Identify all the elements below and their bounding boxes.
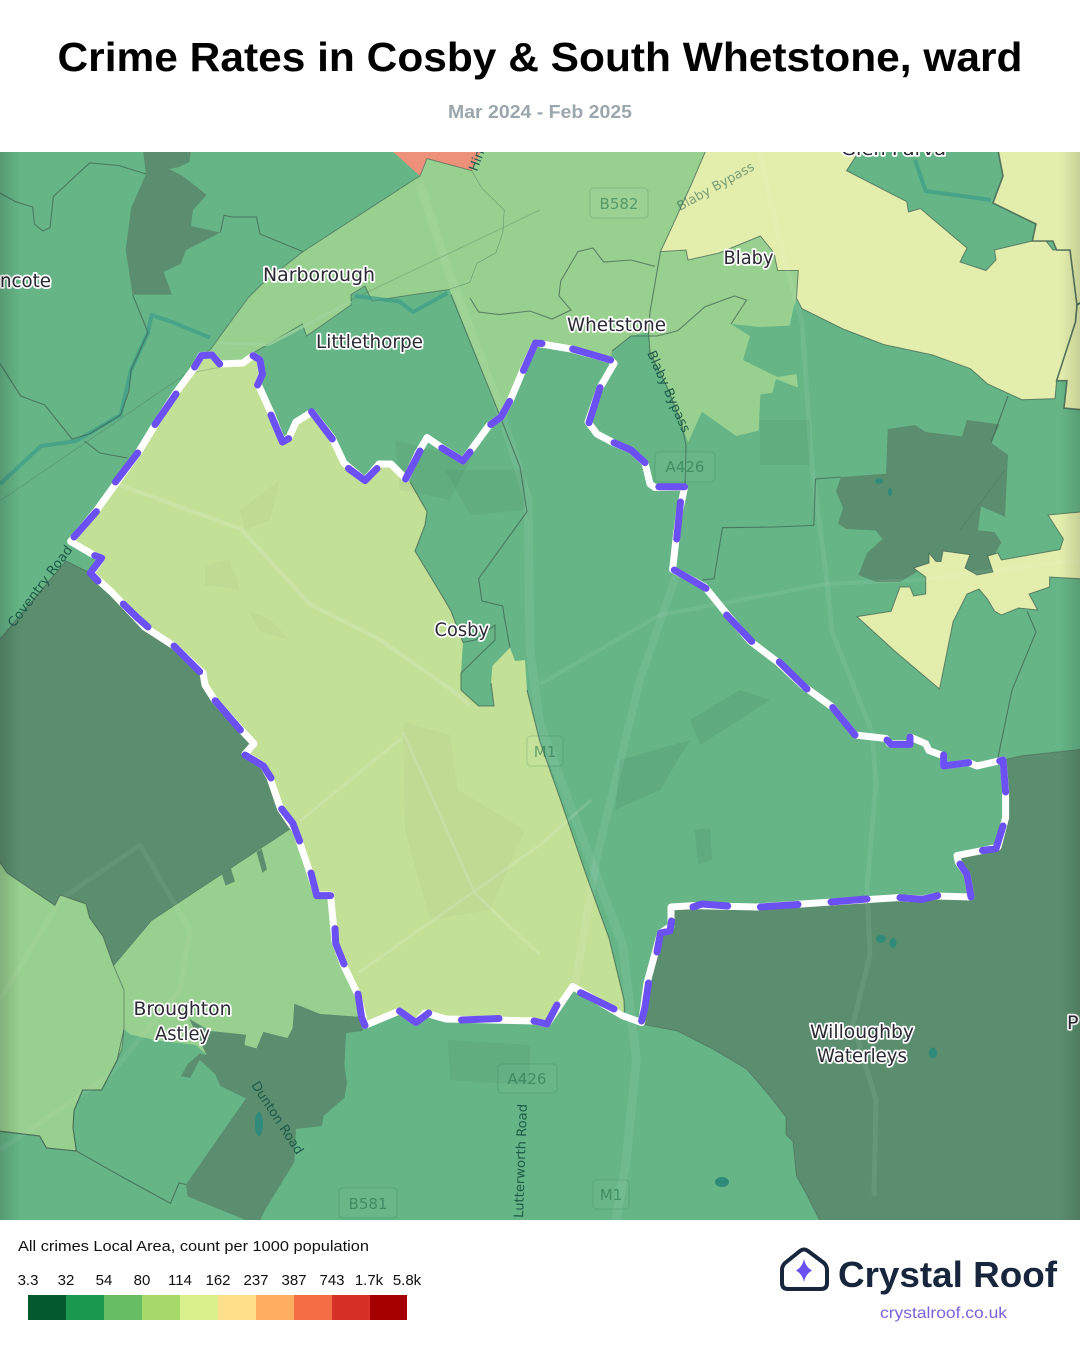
place labels: Littlethorpe [316, 331, 423, 353]
place labels: Astley [155, 1023, 210, 1045]
road name labels: Blaby Bypass [675, 160, 757, 214]
place labels: P [1067, 1012, 1078, 1034]
region: Narborough light green band [201, 159, 504, 364]
road shields: M1 [600, 1186, 622, 1204]
place labels: Whetstone [567, 314, 666, 336]
place labels [0, 138, 1078, 1067]
rivers and canal [0, 160, 991, 484]
brand name: Crystal Roof [838, 1254, 1058, 1295]
road shields: A426 [508, 1070, 546, 1088]
place labels: Willoughby [810, 1021, 914, 1043]
region: dark green Dunton area [181, 1004, 363, 1225]
ward boundary: white base line [71, 343, 1006, 1025]
road name labels: Lutterworth Road [512, 1104, 531, 1218]
place labels: Broughton [134, 998, 232, 1020]
legend scale labels: 32 [58, 1272, 74, 1289]
road name labels [5, 81, 757, 1218]
brand url: crystalroof.co.uk [880, 1305, 1008, 1322]
place labels: Cosby [434, 619, 489, 641]
place labels: ncote [0, 270, 51, 292]
legend scale labels: 5.8k [393, 1272, 422, 1289]
legend scale labels: 162 [205, 1272, 231, 1289]
region: north-east pale yellow area [993, 150, 1080, 305]
legend colour swatches [28, 1295, 407, 1320]
title: Crime Rates in Cosby & South Whetstone, ward [58, 34, 1023, 80]
region: small dark plots [222, 849, 267, 886]
legend scale labels [18, 1272, 422, 1289]
icon: house with star [782, 1250, 827, 1289]
place labels: Waterleys [817, 1045, 907, 1067]
region: Blaby pale yellow area [660, 150, 1077, 400]
legend scale labels: 114 [168, 1272, 192, 1289]
legend [18, 1238, 422, 1320]
region: Blaby light green area [648, 236, 798, 443]
road shields: M1 [534, 743, 556, 761]
place labels: Narborough [263, 264, 375, 286]
region: Broughton Astley light green [114, 830, 365, 1055]
ward boundary: purple dashes [74, 343, 1006, 1025]
road shields: A426 [666, 458, 704, 476]
legend scale labels: 3.3 [18, 1272, 38, 1289]
region: Willoughby Waterleys dark green [642, 749, 1080, 1225]
region: eastern pale yellow patch [857, 512, 1080, 689]
legend title: All crimes Local Area, count per 1000 population [18, 1238, 369, 1255]
region: salmon high-crime area [393, 152, 480, 176]
land-use patches on lime and green areas [399, 470, 769, 865]
map edge shading [0, 152, 1080, 1220]
region: western light green [0, 855, 124, 1151]
legend scale labels: 387 [281, 1272, 307, 1289]
road name labels: Coventry Road [5, 543, 76, 630]
road network [7, 270, 994, 1220]
place labels: Blaby [724, 247, 774, 269]
railway line [0, 210, 1005, 530]
legend scale labels: 80 [134, 1272, 150, 1289]
legend scale labels: 54 [96, 1272, 112, 1289]
region: dark green south-west block [0, 561, 296, 966]
road shields [339, 188, 715, 1218]
region: dark green north-west patch [126, 150, 220, 295]
road shields: B581 [349, 1195, 387, 1213]
area boundary lines [0, 163, 1036, 1203]
brand logo [782, 1250, 1058, 1322]
legend scale labels: 1.7k [355, 1272, 384, 1289]
region: far-east pale yellow sliver [1057, 300, 1080, 410]
region: Whetstone light green area [449, 150, 706, 417]
road shields: B582 [600, 195, 638, 213]
road name labels: Blaby Bypass [643, 349, 693, 435]
road name labels: Hinckley Road [467, 81, 512, 173]
road name labels: Dunton Road [248, 1079, 306, 1158]
legend scale labels: 743 [319, 1272, 345, 1289]
ponds [255, 478, 937, 1187]
legend scale labels: 237 [243, 1272, 269, 1289]
subtitle: date range: Mar 2024 - Feb 2025 [448, 102, 632, 122]
region: lime ward west part [71, 355, 624, 1025]
place labels: Glen Parva [841, 138, 946, 160]
region: dark green eastern patch [836, 420, 1008, 582]
